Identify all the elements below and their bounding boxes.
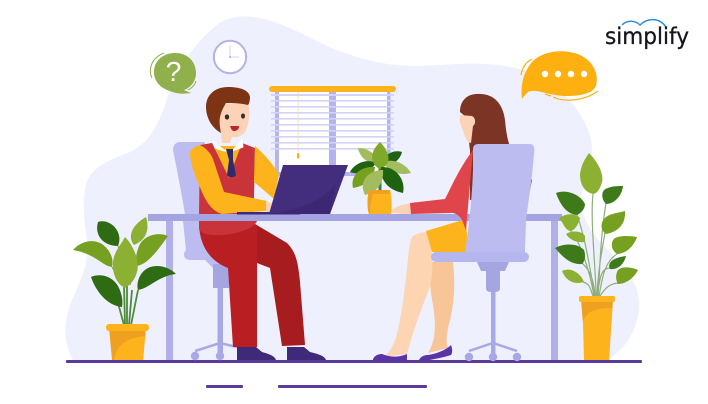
speech bubble: typing dots: [521, 51, 598, 100]
right plant: [555, 153, 638, 360]
logo: simplify: simplify: [605, 24, 689, 50]
hand: [266, 201, 273, 212]
vest lower: [199, 221, 257, 235]
sleeve far: [254, 146, 279, 199]
hair: [206, 87, 250, 133]
red top: [410, 150, 473, 230]
sleeve near: [190, 145, 267, 214]
mouth: [230, 126, 239, 131]
floor line: [66, 360, 642, 363]
hair: [460, 94, 532, 200]
vest: [199, 143, 255, 214]
table: [148, 214, 562, 360]
floor dash left: [206, 385, 243, 388]
skirt: [426, 219, 468, 252]
speech bubble: question: ?: [166, 56, 181, 87]
speech bubble: question: [150, 53, 196, 94]
shoes: [373, 345, 452, 361]
trousers: [199, 221, 305, 347]
woman: [373, 94, 532, 361]
shoes: [237, 347, 326, 360]
hand: [391, 203, 411, 214]
back leg: [428, 262, 454, 353]
neck and face: [216, 103, 249, 143]
face: [460, 115, 475, 143]
front leg: [383, 232, 432, 357]
shirt: [212, 146, 244, 182]
floor dash right: [278, 385, 427, 388]
man's chair: [173, 142, 237, 360]
background blob: [65, 16, 639, 360]
eyes: [225, 113, 245, 120]
collar: [213, 140, 243, 151]
tie: [226, 149, 236, 177]
woman's chair: [431, 144, 534, 361]
clock: [214, 41, 246, 73]
left plant: [73, 217, 176, 360]
man: [190, 87, 326, 360]
window with blinds: [269, 86, 396, 176]
desk plant: [350, 142, 411, 214]
laptop: [237, 165, 348, 214]
